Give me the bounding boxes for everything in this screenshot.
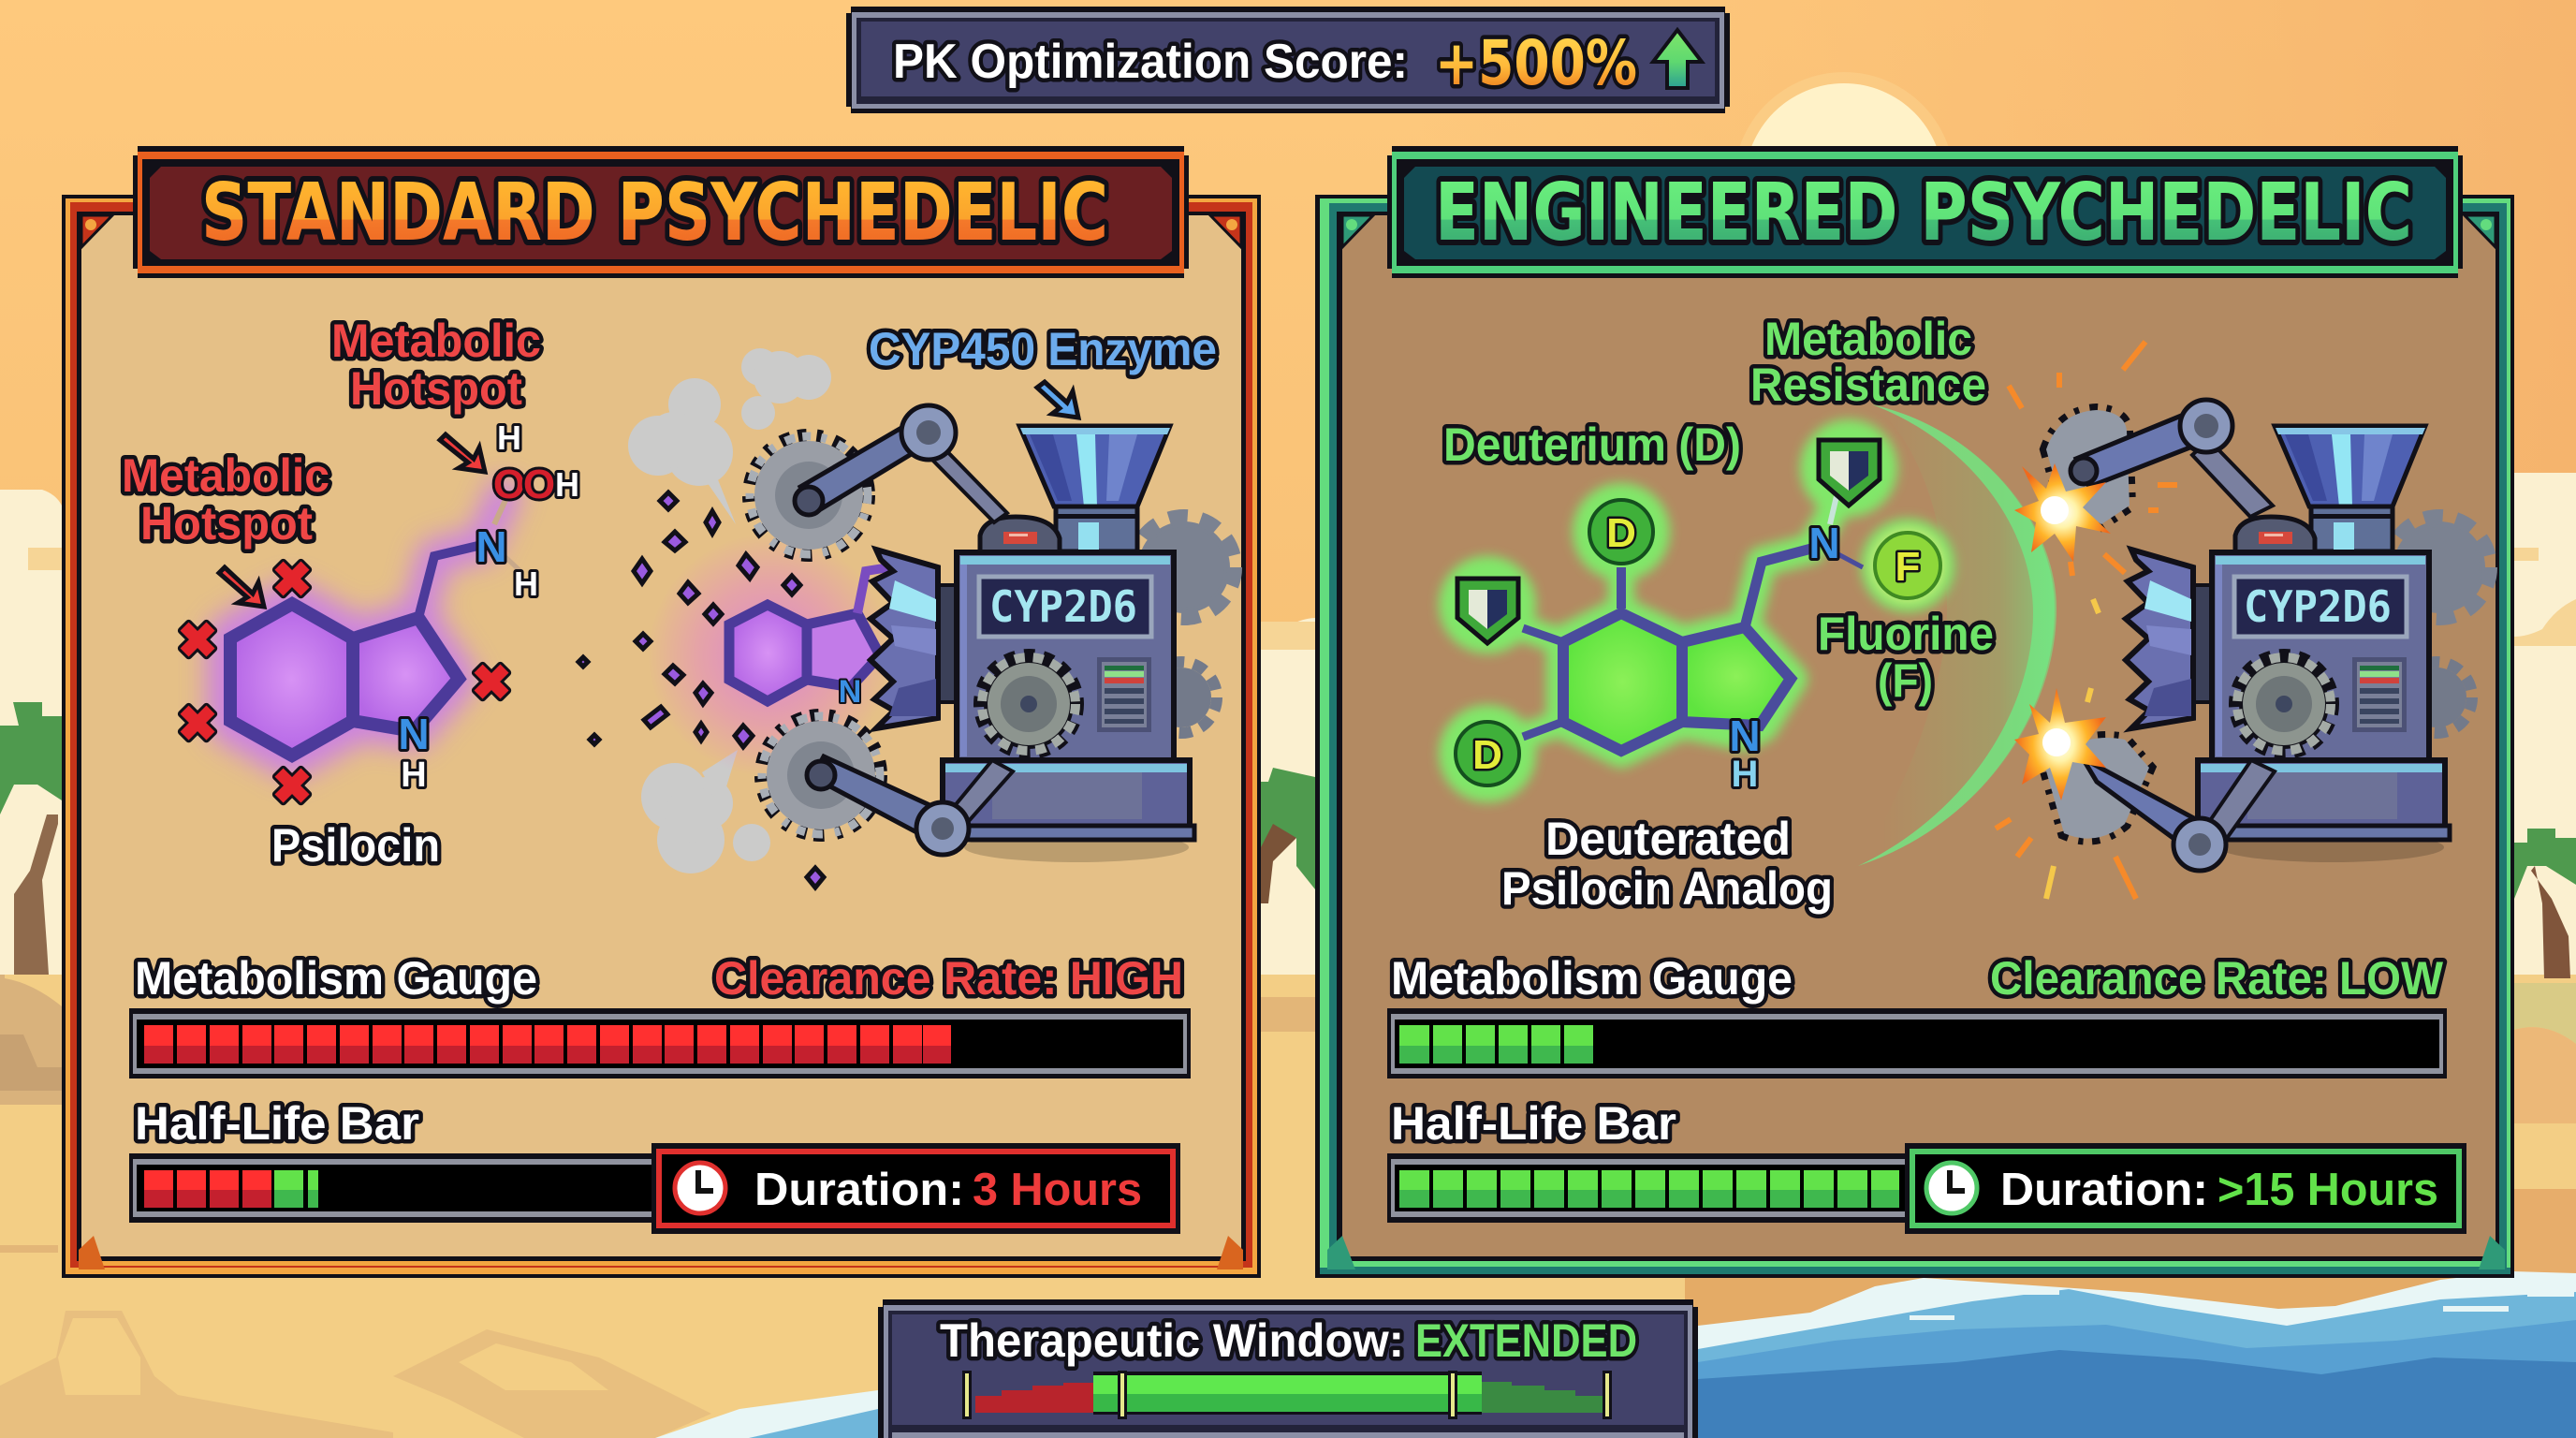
label: metabolic resistance: Metabolic xyxy=(1764,313,1972,365)
lower left dunes xyxy=(0,1311,711,1438)
therapeutic window box xyxy=(878,1299,1698,1438)
atoms: O xyxy=(523,462,555,507)
banner: standard psychedelic xyxy=(133,146,1189,278)
icon: up arrow xyxy=(1653,30,1702,88)
machine label: CYP2D6 xyxy=(989,581,1137,632)
duration text: >15 Hours xyxy=(2217,1165,2438,1215)
atoms xyxy=(398,418,579,795)
hotspot x marks: ✖ xyxy=(471,656,512,711)
wet sand xyxy=(1685,1278,2576,1438)
label: metabolic hotspot left: Metabolic xyxy=(122,449,329,502)
deuterium atom left xyxy=(1456,722,1519,785)
hotspot x marks: ✖ xyxy=(177,614,218,668)
smoke clouds xyxy=(628,348,831,873)
icon: clock xyxy=(1926,1163,1977,1213)
label: CYP450 enzyme: CYP450 Enzyme xyxy=(869,323,1217,375)
therapeutic window label xyxy=(940,1314,1637,1367)
banner: engineered psychedelic xyxy=(1387,146,2463,278)
bottom saw arm xyxy=(2045,738,2275,871)
label: metabolic hotspot left: Hotspot xyxy=(140,497,313,550)
left dunes xyxy=(0,975,62,1105)
half-life bar xyxy=(1387,1153,1911,1223)
right side sand xyxy=(2514,983,2576,1273)
impact spark top xyxy=(2014,463,2111,562)
label: metabolic resistance xyxy=(1750,313,1986,411)
molecule: deuterated analog xyxy=(1446,427,1949,795)
green aura xyxy=(1446,427,1949,795)
left sand xyxy=(0,975,2576,1438)
score value: +500% xyxy=(1435,27,1637,99)
metabolism gauge bar xyxy=(129,1008,1191,1078)
duration text: 3 Hours xyxy=(973,1165,1142,1215)
atoms: H xyxy=(514,565,538,603)
molecule: deuterated analog: H xyxy=(1732,754,1758,795)
icon: shield top xyxy=(1819,440,1880,506)
top saw arm xyxy=(2046,400,2273,524)
atoms: N xyxy=(476,522,507,571)
duration text: Duration: xyxy=(754,1165,964,1215)
label: deuterium: Deuterium (D) xyxy=(1443,418,1741,471)
label: deuterated psilocin analog xyxy=(1501,813,1833,915)
label: deuterated psilocin analog: Psilocin Analog xyxy=(1501,862,1833,915)
duration text: Duration: xyxy=(2000,1165,2208,1215)
shield bubble xyxy=(1858,404,2056,866)
label: fluorine xyxy=(1818,608,1994,707)
machine label: CYP2D6 xyxy=(2244,581,2392,632)
label: deuterated psilocin analog: Deuterated xyxy=(1545,813,1791,865)
duration text xyxy=(754,1165,1142,1215)
atoms: O xyxy=(493,462,525,507)
clearance rate label: Clearance Rate: HIGH xyxy=(714,952,1183,1005)
molecule being destroyed xyxy=(648,534,891,777)
hotspot x marks: ✖ xyxy=(271,760,313,814)
panel: engineered psychedelic xyxy=(1315,146,2514,1278)
bottom saw arm xyxy=(761,715,1013,855)
deuterium atom top xyxy=(1589,500,1653,564)
clearance rate label: Clearance Rate: LOW xyxy=(1990,952,2444,1005)
impact spark bottom xyxy=(2014,688,2106,800)
ocean xyxy=(655,1271,2576,1438)
metabolism gauge label: Metabolism Gauge xyxy=(135,952,537,1005)
molecule: psilocin xyxy=(177,418,579,814)
icon: clock xyxy=(675,1163,725,1213)
rings xyxy=(1563,613,1682,751)
half-life bar xyxy=(129,1153,663,1223)
label: metabolic resistance: Resistance xyxy=(1750,359,1986,411)
machine right xyxy=(2045,400,2490,871)
deuterium atom top: D xyxy=(1606,510,1636,556)
clouds xyxy=(0,473,2576,1002)
label: metabolic hotspot left xyxy=(122,449,329,550)
rings xyxy=(230,604,353,756)
label: metabolic hotspot top: Metabolic xyxy=(331,315,541,367)
hotspot x marks: ✖ xyxy=(271,553,313,608)
panel: standard psychedelic xyxy=(62,146,1261,1278)
hotspot x marks: ✖ xyxy=(177,697,218,752)
half-life bar label: Half-Life Bar xyxy=(1391,1097,1676,1150)
score label: PK Optimization Score: xyxy=(893,35,1408,89)
molecule being destroyed: N xyxy=(839,674,861,710)
arrow: hotspot top xyxy=(440,434,485,472)
atoms: H xyxy=(497,418,521,457)
arrow: hotspot left xyxy=(219,567,264,607)
atoms: N xyxy=(1808,519,1840,567)
score box xyxy=(846,7,1730,113)
top saw arm xyxy=(749,405,1007,555)
fluorine atom: F xyxy=(1895,544,1920,590)
label: metabolic hotspot top: Hotspot xyxy=(350,362,522,415)
duration callout xyxy=(651,1143,1180,1234)
purple aura xyxy=(230,483,509,756)
label: fluorine: Fluorine xyxy=(1818,608,1994,660)
label: fluorine: (F) xyxy=(1878,654,1933,707)
half-life bar label: Half-Life Bar xyxy=(135,1097,419,1150)
window markers xyxy=(962,1371,1612,1419)
deuterium atom left: D xyxy=(1472,732,1502,778)
atoms: H xyxy=(401,756,427,795)
icon: shield left xyxy=(1457,579,1518,643)
flying sparks xyxy=(1996,342,2177,899)
duration callout xyxy=(1905,1143,2466,1234)
therapeutic window label: Therapeutic Window: xyxy=(940,1314,1404,1367)
label: psilocin: Psilocin xyxy=(271,819,440,872)
label: metabolic hotspot top xyxy=(331,315,541,415)
panel frame and brown fill xyxy=(1315,195,2514,1278)
atoms: H xyxy=(555,465,579,504)
duration text xyxy=(2000,1165,2438,1215)
arrow: enzyme xyxy=(1037,382,1078,418)
banner title: STANDARD PSYCHEDELIC xyxy=(201,167,1108,259)
metabolite fragments xyxy=(578,492,824,888)
therapeutic window bar xyxy=(962,1371,1612,1419)
sun xyxy=(1734,72,1954,293)
fluorine atom xyxy=(1875,533,1940,598)
panel frame and parchment xyxy=(62,195,1261,1278)
atoms: N xyxy=(398,710,430,758)
metabolism gauge label: Metabolism Gauge xyxy=(1391,952,1793,1005)
molecule: deuterated analog: N xyxy=(1729,712,1761,760)
metabolism gauge bar xyxy=(1387,1008,2447,1078)
palm trees xyxy=(0,702,2576,978)
therapeutic window label: EXTENDED xyxy=(1415,1314,1637,1367)
machine left xyxy=(749,405,1235,862)
hotspot x marks xyxy=(177,553,512,814)
